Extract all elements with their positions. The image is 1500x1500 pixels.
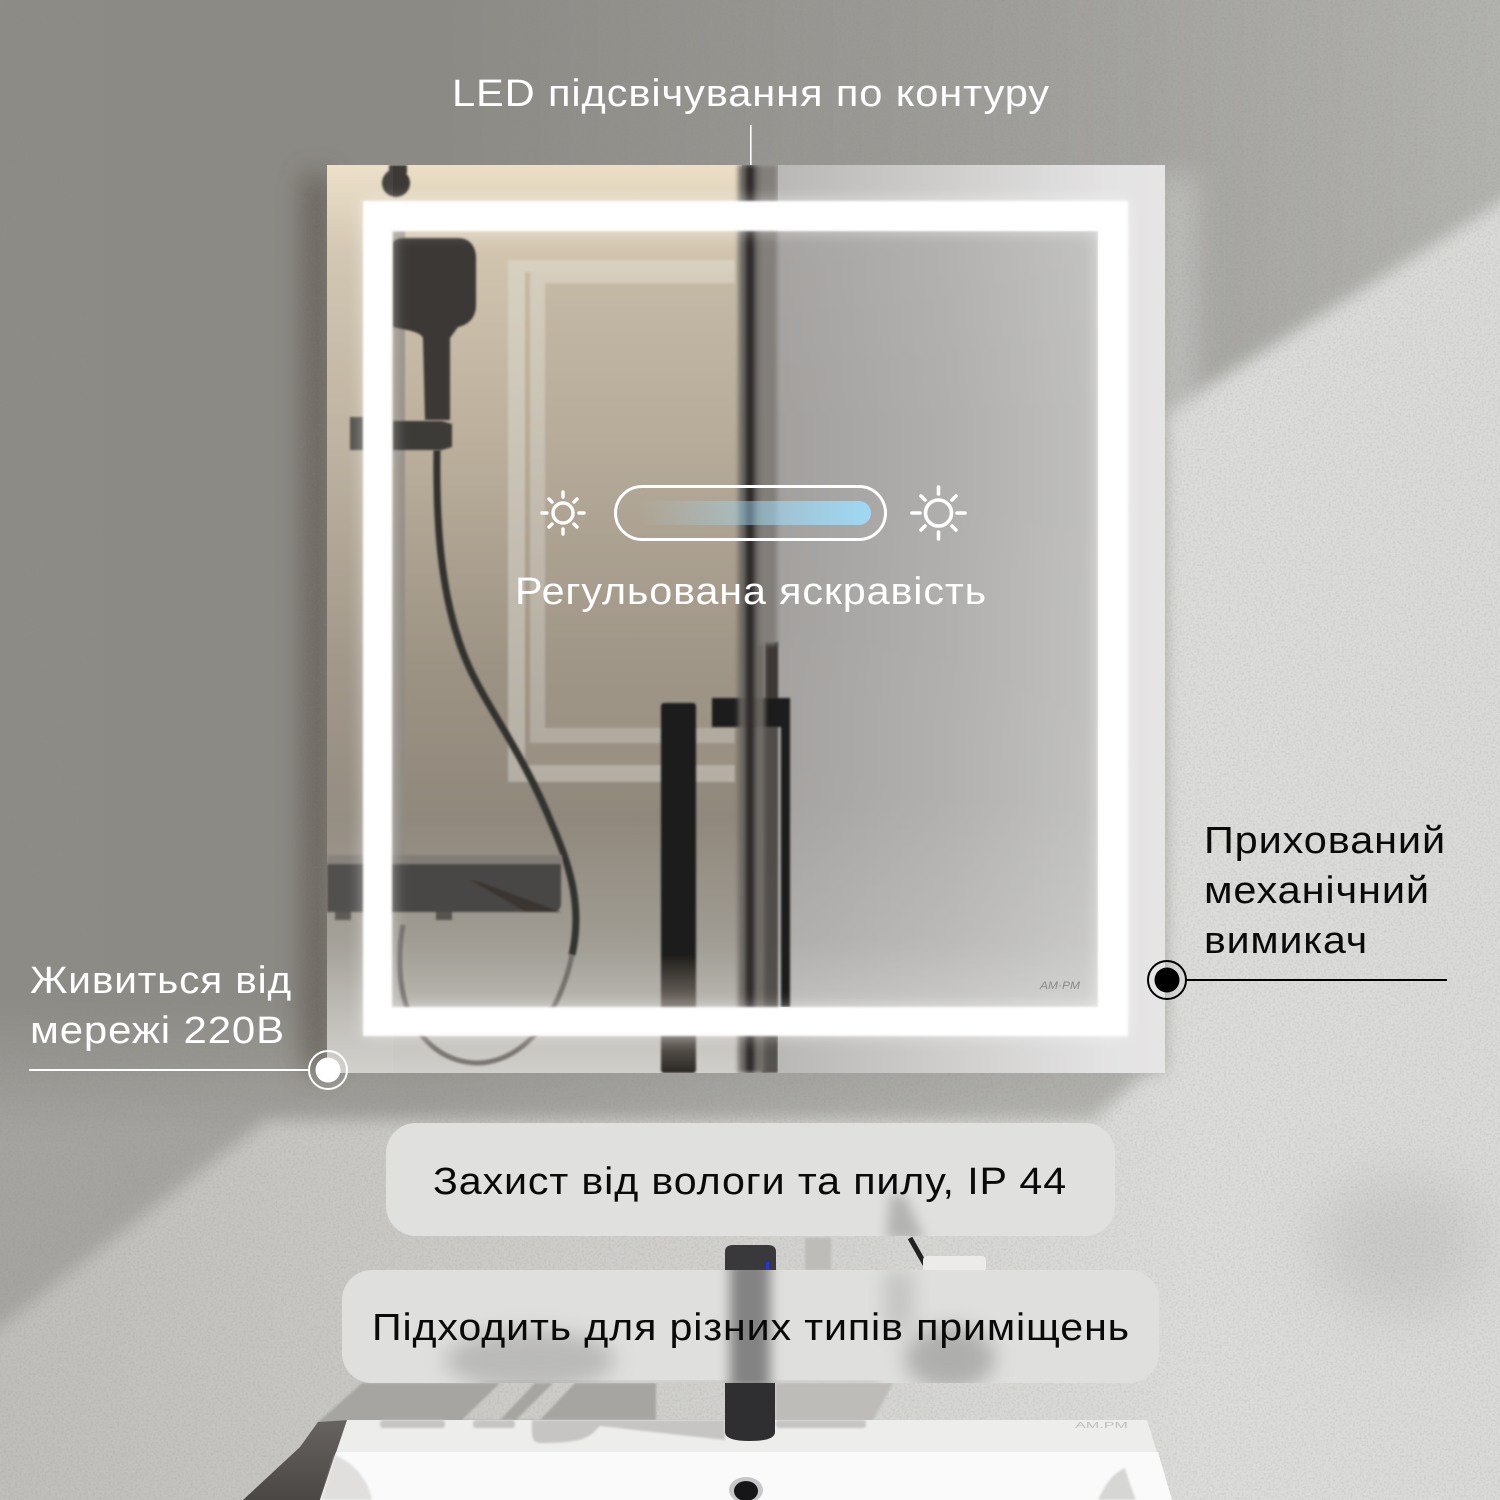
callout: top line (750, 125, 752, 165)
LED contour light (363, 201, 1128, 1036)
power text: мережі 220В (30, 1010, 285, 1052)
basin bowl (320, 1452, 1172, 1500)
shelf (327, 855, 562, 920)
soft shadow lower right (1315, 1175, 1485, 1315)
switch text: механічний (1204, 870, 1430, 912)
frame right top and bottom bands (778, 165, 1165, 1073)
faucet body (725, 1380, 775, 1441)
icon: small sun (542, 492, 584, 534)
blurred objects behind pill (445, 1258, 995, 1398)
slider track (616, 486, 886, 540)
faucet indicator (766, 1262, 769, 1271)
mirror (327, 165, 1165, 1073)
cool right half (776, 165, 1098, 1007)
hook top (382, 165, 410, 197)
frame left tint (328, 166, 393, 918)
towel rail (661, 642, 790, 1073)
switch marker (1148, 961, 1186, 999)
glow right of mirror (1160, 175, 1196, 415)
slider fill (640, 501, 871, 525)
callout pill: protection (386, 1123, 1115, 1240)
callout pill: room types (342, 1270, 1159, 1383)
power leader line (29, 1069, 309, 1071)
mirror side shadow (305, 175, 329, 1070)
basin brand mark: AM.PM (1075, 1421, 1129, 1430)
power text (30, 960, 292, 1052)
power marker (309, 1051, 347, 1089)
power text: Живиться від (30, 960, 292, 1002)
warm left half (327, 165, 742, 1073)
heading: LED contour: LED підсвічування по контуру (452, 73, 1050, 115)
faucet head (725, 1245, 776, 1290)
wall bracket (350, 417, 364, 450)
shower head (393, 238, 476, 420)
brand mark on mirror: AM·PM (1039, 980, 1081, 992)
basin shadow left corner (321, 1455, 372, 1500)
glass door pole (738, 165, 777, 1073)
basin left shadow (243, 1420, 349, 1500)
faucet shadows on wall (316, 1238, 893, 1424)
switch text: вимикач (1204, 920, 1368, 962)
shower hose lower (400, 925, 572, 1063)
door moulding reflection (508, 260, 735, 782)
cup (923, 1256, 986, 1272)
brightness caption: Регульована яскравість (515, 571, 987, 613)
callout: switch (1148, 820, 1447, 999)
faucet and accessories (725, 1238, 986, 1290)
blurred reflection (886, 1195, 925, 1240)
callout: power (29, 960, 347, 1089)
room types text: Підходить для різних типів приміщень (372, 1307, 1130, 1349)
drain (729, 1477, 763, 1500)
protection text: Захист від вологи та пилу, IP 44 (433, 1161, 1067, 1203)
basin shadow right corner (1098, 1468, 1136, 1500)
basin (243, 1380, 1172, 1500)
switch text: Прихований (1204, 820, 1446, 862)
toothbrush (910, 1238, 927, 1268)
frost at mirror bottom (327, 978, 980, 1073)
switch text (1204, 820, 1446, 962)
shower holder (393, 421, 452, 450)
LED glow (363, 201, 1128, 1036)
brightness control (515, 486, 987, 613)
shower hose upper (437, 450, 576, 955)
switch leader line (1186, 979, 1447, 981)
faucet shadows on basin (380, 1420, 866, 1443)
icon: large sun (912, 487, 965, 539)
shower rail (393, 231, 405, 881)
